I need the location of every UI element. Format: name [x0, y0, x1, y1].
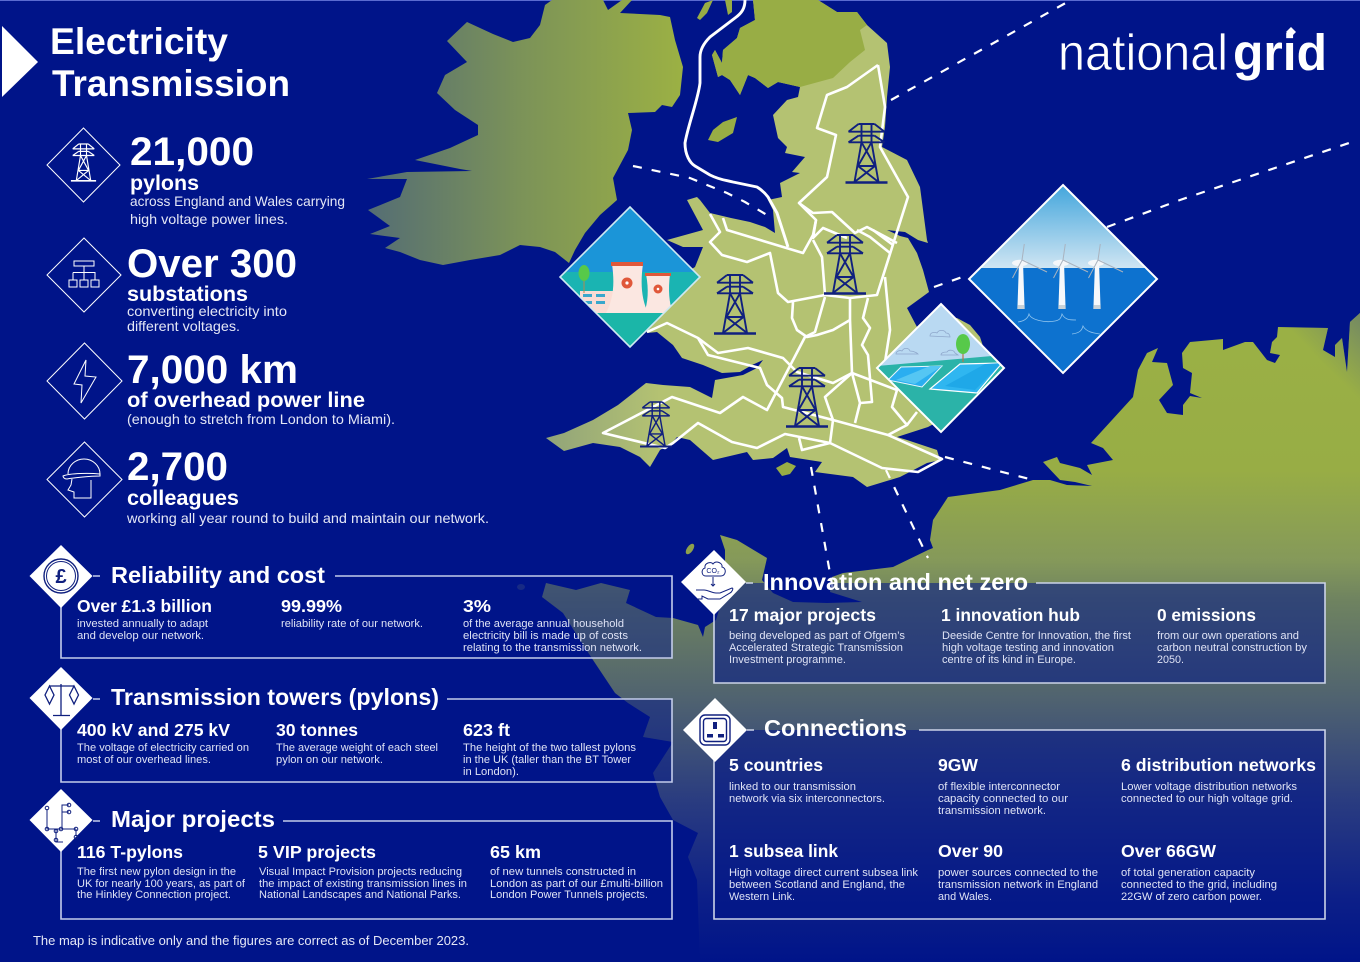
stat: pylons: across England and Wales carrying — [130, 193, 345, 209]
stat: subsea link: High voltage direct current subsea link — [729, 867, 919, 879]
stat: power sources: power sources connected to the — [938, 867, 1098, 879]
icon: pound coin: £ — [55, 566, 67, 588]
stat: substations: converting electricity into — [127, 303, 287, 319]
stat: subsea link: between Scotland and England, the — [729, 879, 905, 891]
stat: colleagues: 2,700 — [127, 445, 228, 489]
stat: pylons — [47, 128, 345, 227]
stat: distribution networks — [1121, 755, 1316, 805]
stat: reliability rate — [281, 596, 423, 630]
icon: plug socket — [683, 698, 747, 762]
stat: countries: network via six interconnectors. — [729, 793, 885, 805]
icon: substation diagram in diamond — [47, 238, 121, 312]
icon: lightning bolt in diamond — [47, 343, 122, 419]
stat: bill share: relating to the transmission network. — [463, 642, 642, 654]
stat: VIP projects — [258, 842, 467, 901]
stat: countries: linked to our transmission — [729, 781, 856, 793]
stat: bill share: of the average annual household — [463, 618, 624, 630]
stat: generation capacity: 22GW of zero carbon power. — [1121, 891, 1262, 903]
stat: T-pylons: 116 T-pylons — [77, 842, 183, 862]
stat: overhead power line: (enough to stretch from London to Miami). — [127, 411, 395, 427]
stat: generation capacity: Over 66GW — [1121, 841, 1216, 861]
stat: interconnector capacity: of flexible interconnector — [938, 781, 1060, 793]
panel: reliability and cost — [30, 545, 672, 658]
stat: height: in London). — [463, 766, 519, 778]
stat: voltage: most of our overhead lines. — [77, 754, 211, 766]
map: Great Britain — [546, 0, 985, 487]
logo: national grid — [1058, 24, 1327, 81]
stat: bill share: electricity bill is made up of costs — [463, 630, 629, 642]
stat: major projects — [729, 605, 906, 666]
stat: tunnels: of new tunnels constructed in — [490, 866, 636, 878]
stat: overhead power line: of overhead power line — [127, 389, 365, 412]
map: Ireland — [367, 0, 683, 265]
illustration: nuclear power station — [560, 207, 700, 347]
stat: VIP projects: National Landscapes and National Parks. — [259, 889, 461, 901]
icon: hard hat worker in diamond — [47, 442, 122, 517]
stat: generation capacity: connected to the grid, including — [1121, 879, 1277, 891]
stat: tunnels: 65 km — [490, 842, 541, 862]
stat: VIP projects: Visual Impact Provision projects reducing — [259, 866, 462, 878]
icon: CO2 cloud over hand — [681, 550, 746, 615]
logo: national grid: national — [1058, 24, 1228, 81]
stat: interconnector capacity: capacity connected to our — [938, 793, 1068, 805]
stat: tunnels: London Power Tunnels projects. — [490, 889, 648, 901]
heading: Transmission towers (pylons) — [111, 684, 439, 710]
stat: substations — [47, 238, 297, 334]
stat: power sources: and Wales. — [938, 891, 992, 903]
stat: tunnels: London as part of our £multi-billion — [490, 878, 663, 890]
stat: T-pylons: The first new pylon design in the — [77, 866, 236, 878]
stat: voltage: 400 kV and 275 kV — [77, 720, 230, 740]
heading: Innovation and net zero — [763, 569, 1028, 595]
stat: interconnector capacity — [938, 755, 1068, 817]
stat: innovation hub: high voltage testing and innovation — [942, 642, 1114, 654]
stat: emissions: 2050. — [1157, 654, 1184, 666]
stat: voltage — [77, 720, 249, 766]
stat: pylons: high voltage power lines. — [130, 211, 288, 227]
stat: weight — [276, 720, 438, 766]
heading: Reliability and cost — [111, 562, 325, 588]
stat: innovation hub: centre of its kind in Europe. — [942, 654, 1076, 666]
footnote: The map is indicative only and the figures are correct as of December 2023. — [33, 934, 469, 948]
stat: bill share: 3% — [463, 596, 491, 616]
stat: major projects: 17 major projects — [729, 605, 876, 625]
icon: CO2 cloud over hand: CO₂ — [706, 568, 720, 575]
stat: reliability rate: reliability rate of our network. — [281, 618, 423, 630]
stat: emissions: carbon neutral construction by — [1157, 642, 1307, 654]
stat: bill share — [463, 596, 642, 654]
stat: major projects: Accelerated Strategic Transmission — [729, 642, 903, 654]
stat: pylons: 21,000 — [130, 130, 254, 174]
stat: reliability rate: 99.99% — [281, 596, 342, 616]
stat: generation capacity — [1121, 841, 1277, 903]
stat: height: in the UK (taller than the BT Tower — [463, 754, 631, 766]
title: Electricity — [50, 21, 228, 62]
stat: innovation hub: Deeside Centre for Innovation, the first — [942, 630, 1131, 642]
title — [2, 21, 290, 104]
stat: VIP projects: 5 VIP projects — [258, 842, 376, 862]
stat: height: 623 ft — [463, 720, 510, 740]
stat: T-pylons — [77, 842, 246, 901]
stat: subsea link: 1 subsea link — [729, 841, 838, 861]
icon: pylon wales — [714, 275, 756, 334]
stat: countries: 5 countries — [729, 755, 823, 775]
icon: pylon north — [846, 124, 888, 182]
stat: major projects: Investment programme. — [729, 654, 846, 666]
stat: weight: The average weight of each steel — [276, 742, 438, 754]
stat: distribution networks: 6 distribution networks — [1121, 755, 1316, 775]
stat: emissions: from our own operations and — [1157, 630, 1299, 642]
stat: innovation hub: 1 innovation hub — [941, 605, 1080, 625]
stat: subsea link — [729, 841, 919, 903]
panel: transmission towers — [30, 667, 672, 782]
stat: countries — [729, 755, 885, 805]
stat: interconnector capacity: transmission network. — [938, 805, 1046, 817]
stat: interconnector capacity: 9GW — [938, 755, 978, 775]
stat: emissions: 0 emissions — [1157, 605, 1256, 625]
logo: national grid: grid — [1233, 24, 1327, 81]
stat: height — [463, 720, 636, 778]
stat: subsea link: Western Link. — [729, 891, 795, 903]
stat: major projects: being developed as part of Ofgem’s — [729, 630, 906, 642]
panel: innovation and net zero — [681, 550, 1325, 683]
stat: substations: different voltages. — [127, 318, 240, 334]
map: continental Europe — [542, 313, 1360, 962]
stat: substations: substations — [127, 283, 248, 306]
stat: power sources — [938, 841, 1098, 903]
stat: emissions — [1157, 605, 1307, 666]
icon: pylon in diamond — [47, 128, 120, 202]
stat: investment: Over £1.3 billion — [77, 596, 212, 616]
stat: colleagues — [47, 442, 489, 526]
stat: T-pylons: UK for nearly 100 years, as part of — [77, 878, 246, 890]
stat: overhead power line — [47, 343, 395, 427]
stat: pylons: pylons — [130, 172, 199, 195]
stat: colleagues: colleagues — [127, 487, 239, 510]
stat: T-pylons: the Hinkley Connection project. — [77, 889, 231, 901]
icon: circuit map — [30, 789, 92, 852]
title: Transmission — [52, 63, 290, 104]
illustration: offshore wind farm — [969, 185, 1157, 373]
panel: connections — [683, 698, 1325, 919]
stat: distribution networks: connected to our high voltage grid. — [1121, 793, 1293, 805]
stat: weight: pylon on our network. — [276, 754, 383, 766]
stat: voltage: The voltage of electricity carried on — [77, 742, 249, 754]
icon: pylon south — [786, 368, 828, 426]
stat: weight: 30 tonnes — [276, 720, 358, 740]
stat: tunnels — [490, 842, 663, 901]
icon: pound coin — [30, 545, 92, 608]
stat: distribution networks: Lower voltage distribution networks — [1121, 781, 1298, 793]
stat: height: The height of the two tallest pylons — [463, 742, 636, 754]
stat: colleagues: working all year round to build and maintain our network. — [126, 510, 489, 526]
stat: overhead power line: 7,000 km — [127, 348, 298, 392]
heading: Major projects — [111, 806, 275, 832]
panel: major projects — [30, 789, 672, 919]
stat: investment: and develop our network. — [77, 630, 204, 642]
icon: pylon midlands — [824, 235, 866, 294]
stat: power sources: transmission network in England — [938, 879, 1098, 891]
stat: substations: Over 300 — [127, 242, 297, 286]
stat: investment — [77, 596, 212, 642]
stat: generation capacity: of total generation capacity — [1121, 867, 1255, 879]
stat: VIP projects: the impact of existing transmission lines in — [259, 878, 467, 890]
dashed interconnector lines — [633, 0, 1358, 590]
heading: Connections — [764, 715, 907, 741]
icon: pylon south west — [640, 402, 672, 446]
stat: investment: invested annually to adapt — [77, 618, 208, 630]
illustration: solar farm — [877, 304, 1004, 432]
stat: innovation hub — [941, 605, 1131, 666]
transmission network lines — [603, 0, 942, 472]
icon: weighing scales — [30, 667, 92, 730]
stat: power sources: Over 90 — [938, 841, 1003, 861]
